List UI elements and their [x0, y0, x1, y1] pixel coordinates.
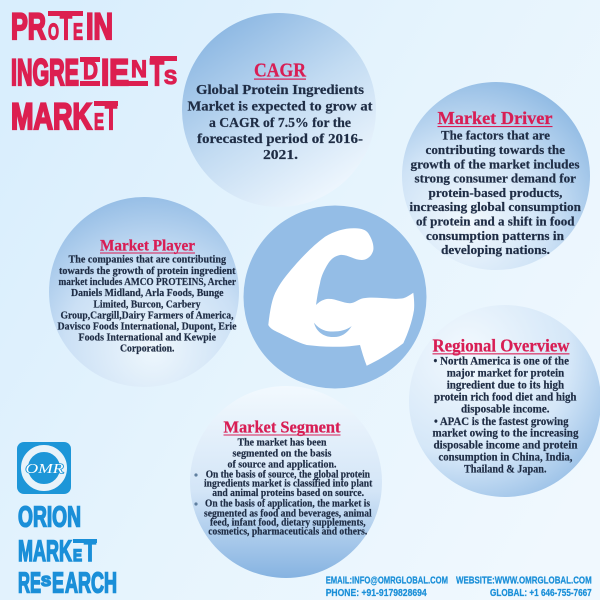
- Regional Overview heading: Regional Overview: [432, 336, 570, 356]
- title: T: [60, 5, 72, 47]
- Regional Overview text: market owing to the increasing: [432, 428, 579, 440]
- brand name: Orion Market Research: S: [41, 573, 51, 590]
- Market Driver text: growth of the market includes: [410, 156, 580, 171]
- CAGR text: Market is expected to grow at: [188, 100, 373, 114]
- Market Player text: Foods International and Kewpie: [78, 333, 216, 344]
- panel: CAGR: [182, 13, 376, 207]
- icon: flexed arm: [268, 228, 414, 366]
- CAGR text: a CAGR of 7.5% for the: [209, 116, 351, 131]
- Market Segment text: [194, 438, 373, 538]
- CAGR text: Global Protein Ingredients: [196, 83, 365, 98]
- Market Driver text: [410, 128, 582, 257]
- CAGR text: 2021.: [263, 148, 298, 163]
- Regional Overview text: major market for protein: [447, 367, 565, 379]
- Market Segment text: ingredients market is classified into plant: [204, 479, 373, 490]
- Market Driver text: increasing global consumption: [410, 199, 582, 214]
- Market Driver text: strong consumer demand for: [414, 171, 576, 186]
- Regional Overview text: • APAC is the fastest growing: [434, 416, 569, 428]
- title: MARK: [11, 95, 92, 137]
- brand name: Orion Market Research: [18, 502, 117, 600]
- CAGR heading: CAGR: [254, 60, 306, 82]
- Market Player text: Group,Cargill,Dairy Farmers of America,: [60, 310, 234, 321]
- title: IN: [86, 5, 113, 47]
- title: PR: [11, 5, 46, 47]
- Market Driver text: of protein and a shift in food: [416, 214, 575, 229]
- contact details: [326, 574, 592, 599]
- contact details: EMAIL:INFO@OMRGLOBAL.COM: [326, 574, 448, 586]
- brand name: Orion Market Research: E: [73, 546, 82, 565]
- Market Segment text: of source and application.: [228, 459, 337, 470]
- Regional Overview text: protein rich food diet and high: [434, 391, 577, 403]
- Market Segment text: On the basis of application, the market is: [205, 499, 370, 510]
- Market Player heading: Market Player: [100, 238, 195, 255]
- Regional Overview text: [432, 355, 579, 475]
- Market Driver text: developing nations.: [441, 242, 550, 257]
- Market Segment text: The market has been: [238, 438, 327, 449]
- Market Player text: [58, 255, 237, 355]
- brand name: Orion Market Research: ARCH: [65, 568, 117, 600]
- Market Segment circle: [190, 386, 382, 578]
- Market Player text: towards the growth of protein ingredient: [59, 266, 236, 277]
- title: IE: [101, 51, 129, 93]
- brand name: Orion Market Research: E: [52, 568, 64, 600]
- contact details: PHONE: +91-9179828694: [326, 587, 427, 599]
- Market Segment text: segmented as food and beverages, animal: [204, 508, 372, 519]
- Regional Overview text: • North America is one of the: [434, 355, 569, 367]
- Market Player text: Limited, Burcon, Carbery: [94, 299, 201, 310]
- title: T: [105, 95, 117, 137]
- Market Segment heading: Market Segment: [224, 418, 341, 437]
- Regional Overview text: ingredient due to its high: [447, 379, 565, 391]
- title: INGRE: [11, 51, 79, 93]
- brand name: Orion Market Research: MARK: [18, 535, 72, 568]
- title: D: [83, 55, 98, 85]
- Market Player text: market includes AMCO PROTEINS, Archer: [58, 277, 236, 288]
- title: S: [164, 67, 177, 89]
- brand name: Orion Market Research: ORION: [18, 502, 81, 534]
- Market Segment text: feed, infant food, dietary supplements,: [210, 518, 366, 529]
- title: T: [150, 51, 164, 93]
- Market Driver text: protein-based products,: [428, 185, 562, 200]
- Market Player text: Davisco Foods International, Dupont, Erie: [58, 321, 237, 332]
- Regional Overview text: Thailand & Japan.: [464, 463, 547, 475]
- Market Driver text: The factors that are: [441, 128, 550, 142]
- Market Driver circle: [402, 82, 590, 270]
- Regional Overview text: disposable income and protein: [434, 440, 578, 452]
- Regional Overview circle: [409, 305, 600, 497]
- Regional Overview text: disposable income.: [461, 403, 550, 415]
- Market Player circle: [49, 197, 239, 387]
- panel: Market Player: [49, 197, 239, 387]
- title: O: [48, 18, 59, 44]
- logo: OMR badge: [17, 442, 71, 494]
- CAGR text: forecasted period of 2016-: [197, 132, 363, 147]
- Market Player text: Daniels Midland, Arla Foods, Bunge: [71, 288, 224, 299]
- title: N: [131, 56, 147, 83]
- Regional Overview text: consumption in China, India,: [438, 452, 573, 464]
- title: E: [94, 108, 104, 134]
- Market Player text: The companies that are contributing: [68, 255, 227, 266]
- brand name: Orion Market Research: RE: [18, 568, 41, 600]
- title: E: [73, 18, 83, 44]
- logo: OMR badge: OMR: [26, 462, 64, 477]
- brand name: Orion Market Research: T: [84, 535, 96, 568]
- Market Driver text: consumption patterns in: [426, 228, 565, 243]
- panel: Market Segment: [190, 386, 382, 578]
- panel: muscle icon circle: [244, 206, 426, 388]
- Market Segment text: and animal proteins based on source.: [212, 488, 364, 499]
- panel: Market Driver: [402, 82, 590, 270]
- panel: Regional Overview: [409, 305, 600, 497]
- title: [11, 5, 177, 137]
- Market Segment text: On the basis of source, the global protein: [206, 470, 370, 481]
- CAGR circle: [182, 13, 376, 207]
- Market Driver text: contributing towards the: [426, 142, 565, 157]
- Market Segment text: cosmetics, pharmaceuticals and others.: [208, 527, 368, 538]
- CAGR text: [188, 83, 373, 163]
- Market Player text: Corporation.: [120, 344, 175, 355]
- Market Segment text: segmented on the basis: [232, 449, 332, 460]
- Market Driver heading: Market Driver: [438, 108, 552, 128]
